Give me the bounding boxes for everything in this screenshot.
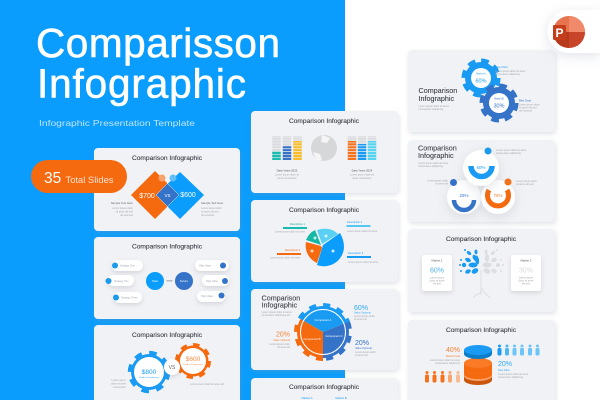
note one [495,65,525,76]
title: Infographic [37,60,246,106]
panel: market slide [251,378,398,400]
gear: blue [130,352,168,392]
circle labels: Future [180,279,188,283]
stat: 20 percent: New Data [498,368,510,372]
right note: sit amet elit sed [201,210,219,214]
gear chart [297,306,349,358]
gear: dark blue: 30% [493,104,505,110]
heading: Comparison Infographic [132,244,203,250]
right note: Lorem ipsum dolor sit amet elit [190,383,224,386]
blue background panel [0,0,345,400]
stat: 20 percent blue: Lorem ipsum dolor [355,351,376,354]
title [36,20,280,106]
note two: do eiusmod [519,110,533,112]
right bars: Description 2 [347,220,363,224]
tree leaves grey [482,249,504,275]
heading: Comparison Infographic [289,384,360,391]
gauge: right: 76% [493,193,503,198]
right pills: High Value [206,280,219,283]
diamond: vs [156,184,179,206]
left pills: Strategy Three [121,296,138,300]
pie chart [306,229,344,266]
panel: ring gauges slide [408,140,555,222]
gauge: right [481,180,515,214]
stat: 20 percent: Lorem ipsum dolor sit amet [498,373,528,376]
left bars: Description 1 [290,222,306,226]
notes: consectetur adipiscing [496,152,521,155]
gauge: left: 25% [459,193,469,198]
right pills [195,260,229,302]
tree leaves blue [459,249,480,275]
notes: Lorem ipsum dolor [516,180,537,183]
circle: past [146,272,164,290]
gear: orange [176,344,210,378]
icon: powerpoint logo [548,10,600,53]
gear: dark blue: Market B [494,98,504,100]
panel: cog percentages slide [408,50,555,132]
market labels: Market B [335,396,347,400]
panel: past and future slide [94,237,240,319]
stat: 20 percent orange: sit amet elit [277,346,290,349]
right bars: Description 4 [348,251,364,255]
left pills: Strategy One [120,264,135,268]
gear: light blue: 60% [475,78,487,84]
card: market 2: Market 2 [521,258,532,262]
left bars: Description 3 [285,248,301,252]
stat: 20 percent: 20% [498,361,512,368]
vs badge: VS [169,365,176,371]
left note: dolor sit amet [111,382,126,386]
card: market 1: dolor sit amet [429,280,445,282]
market labels [301,396,347,400]
heading [418,144,457,160]
heading: Comparison Infographic [132,155,203,162]
right pills: High Value [199,264,212,268]
card: market 2: elit sed [522,282,531,286]
panel: tree slide [408,229,555,312]
left caption: Lorem ipsum dolor sit [275,174,299,176]
diamond: orange [131,171,179,219]
circle labels: Past [152,279,158,283]
intro text [262,311,292,317]
right bars: Lorem ipsum dolor sit amet [348,261,378,264]
heading: Infographic [418,94,454,103]
gear: light blue: Market A [476,72,486,76]
notes [427,149,537,186]
card: market 1: elit sed [433,282,442,286]
card: market 2: 30% [519,268,533,274]
right caption [350,168,374,180]
left note: Sample Text Here [111,201,133,205]
heading: Comparison Infographic [446,236,517,243]
left bars: Lorem ipsum dolor sit amet [275,230,305,234]
tree trunk [473,270,490,298]
orange value: $700 [139,193,155,200]
card: market 1: Lorem ipsum [430,276,444,280]
note two: Lorem ipsum dolor [519,104,540,106]
stat: 20 percent blue [355,340,376,357]
gear: blue: Product Comparison [139,376,160,379]
gear: dark blue [482,86,516,120]
icon: globe [311,135,337,161]
left bars [276,136,298,160]
badge label: Total Slides [66,175,114,186]
stat: 20 percent: consectetur adipiscing [498,376,523,379]
stat: 60 percent: 60% [354,305,368,312]
stat: 20 percent orange: Value Optional [273,338,290,342]
stat: 40 percent: Lorem ipsum dolor sit amet [430,359,460,362]
card: market 2: Lorem ipsum [519,276,533,280]
right bars [352,136,372,160]
stat: 60 percent: Value Optional [354,310,371,314]
people: blue row [498,344,540,356]
market labels: Market A [301,396,313,400]
stat: 20 percent blue: 20% [355,340,369,347]
card: market 2 [511,255,541,291]
panel: diamonds slide [94,148,240,231]
vs label: VS [164,193,171,198]
notes: Lorem ipsum dolor [427,180,448,182]
heading [262,294,300,310]
heading: Comparison Infographic [289,207,360,214]
panel: gear pie slide [251,289,398,370]
gear: orange: $600 [186,356,201,363]
stat: 20 percent blue: sit amet elit [355,354,368,357]
right bars [346,220,378,264]
right note [201,201,224,217]
note one: consectetur adipiscing [495,73,520,76]
stat: 60 percent [354,305,375,321]
intro text: Lorem ipsum dolor sit amet [262,311,292,314]
notes: sit amet elit sed [516,183,534,186]
left caption: amet consectetur [277,177,297,180]
card: market 1: 60% [430,268,444,274]
heading: Comparison [418,86,457,95]
intro text: consectetur adipiscing elit [262,314,290,317]
stat: 20 percent orange [269,332,290,349]
vs badge [164,359,180,375]
people: orange row [425,371,460,382]
small circles [158,174,176,182]
left caption: Data Years 2023 [277,168,298,172]
left caption [275,168,299,180]
heading: Comparison [418,144,457,152]
card: market 1 [422,255,452,291]
intro text: consectetur adipiscing [418,165,443,168]
stat: 40 percent: 40% [446,347,460,354]
notes: Lorem ipsum dolor sit amet [496,149,526,152]
badge number: 35 [44,170,61,187]
stat: 20 percent blue: Value Optional [355,346,372,350]
note two: sit amet elit sed [519,106,537,110]
note one: Lorem ipsum dolor sit amet [495,70,525,73]
blue value: $600 [180,192,196,199]
left note: sit amet elit sed [116,210,134,214]
right caption: Lorem ipsum dolor sit [350,174,374,176]
right pills: High Value [201,295,214,298]
gear: blue: $800 [142,369,157,376]
left pills: Strategy Two [114,280,129,283]
circle: future [175,272,193,290]
circle labels [152,279,188,283]
left note [111,379,126,389]
heading: Infographic [262,300,297,310]
gauge: top: 60% [476,165,486,170]
heading: Comparison Infographic [446,327,517,334]
left note: Lorem ipsum [112,379,126,382]
panel: database and people slide [408,320,555,400]
card: market 1: Market 1 [432,258,443,262]
gear: light blue [464,61,498,95]
intro text: Lorem ipsum dolor sit amet [418,162,448,165]
gauge: top [463,150,499,186]
gauge: left [447,180,481,214]
stat: 40 percent: consectetur adipiscing [435,362,461,365]
disk stack [464,345,492,385]
intro text [418,105,449,111]
left pills [106,260,143,303]
badge: 35 total slides [31,160,127,193]
diamond: blue [156,172,204,219]
left note: Lorem ipsum dolor [112,207,133,210]
note two: Bike Chart [519,98,531,102]
stat: 40 percent [430,347,461,365]
panel: bars and globe slide [251,111,398,193]
gear: orange: Product Comparison [183,363,204,366]
intro text [418,162,448,168]
left bars [270,222,307,260]
card: market 2: dolor sit amet [518,280,534,282]
right note: Lorem ipsum dolor [201,207,222,210]
note two [519,98,540,112]
heading: Comparison Infographic [132,332,203,339]
stat: 20 percent orange: 20% [276,332,290,338]
left bars: Lorem ipsum dolor sit amet [270,256,300,260]
intro text: consectetur adipiscing [418,108,444,111]
stat: 20 percent orange: Lorem ipsum dolor [269,343,290,346]
panel: gears versus slide [94,325,240,400]
heading: Infographic [418,151,454,160]
left note [111,201,134,217]
title: Comparisson [36,20,280,66]
notes: sit amet elit [435,182,448,186]
heading: Comparison [262,294,300,302]
heading: Comparison Infographic [289,118,360,125]
subtitle: Infographic Presentation Template [39,118,195,128]
gear chart: Component A [315,318,332,322]
right note: do eiusmod [201,214,215,217]
left note: consectetur [113,386,126,389]
icon: powerpoint logo: P [555,26,564,40]
stat: 60 percent: sit amet elit [354,318,367,321]
connector [166,280,172,282]
heading [418,86,457,103]
stat: 20 percent [498,361,528,379]
badges [450,148,512,186]
stat: 40 percent: Market Data [446,354,461,358]
intro text: Lorem ipsum dolor sit amet [418,105,449,108]
panel: pie slide [251,200,398,282]
stat: 60 percent: Lorem ipsum dolor [354,315,375,318]
right caption: Data Years 2024 [352,168,373,172]
right note: Sample Text Here [201,201,224,205]
left note: do eiusmod [120,214,134,217]
gear chart: Component B [303,337,321,341]
right bars: Lorem ipsum dolor sit amet [347,230,377,233]
note one: Data Chart [495,65,508,69]
right caption: amet consectetur [352,177,372,180]
gear chart: Component C [325,334,343,338]
